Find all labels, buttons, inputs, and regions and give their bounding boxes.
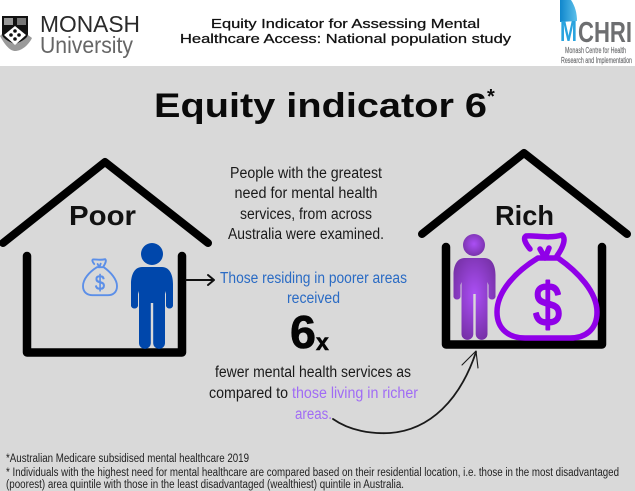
logo: MCHRI: M bbox=[560, 16, 577, 48]
footnotes: (poorest) area quintile with those in the least disadvantaged (wealthiest) quintile in Australia. bbox=[6, 479, 404, 491]
icon: large money bag: $ bbox=[533, 271, 562, 338]
arrow: text to rich house bbox=[333, 351, 478, 433]
logo: MCHRI bbox=[560, 0, 632, 65]
text block: comparison: compared to bbox=[209, 385, 288, 402]
icon: large money bag bbox=[497, 235, 597, 338]
text block: population examined: Australia were examined. bbox=[228, 226, 384, 243]
text block: population examined: People with the greatest bbox=[230, 165, 383, 182]
text block: population examined: services, from across bbox=[240, 206, 372, 223]
icon: small money bag: $ bbox=[95, 272, 105, 295]
logo: Monash University: University bbox=[40, 32, 133, 58]
main title: Equity indicator 6 bbox=[154, 87, 487, 125]
text block: comparison bbox=[209, 364, 418, 423]
label: Rich: Rich bbox=[495, 200, 554, 231]
header title bbox=[180, 17, 512, 46]
big number: 6x bbox=[290, 306, 329, 358]
text block: poorer areas: Those residing in poorer areas bbox=[220, 270, 407, 287]
poor house bbox=[3, 162, 208, 352]
big number: 6x: 6 bbox=[290, 306, 316, 358]
house outline bbox=[422, 153, 627, 344]
label: Poor: Poor bbox=[69, 200, 136, 231]
arrow: poor to text bbox=[186, 275, 214, 285]
text block: poorer areas bbox=[220, 270, 407, 307]
text block: poorer areas: received bbox=[287, 290, 340, 307]
house outline bbox=[3, 162, 208, 352]
footnotes: *Australian Medicare subsidised mental healthcare 2019 bbox=[6, 453, 249, 465]
icon: person purple bbox=[454, 234, 496, 340]
text block: comparison: fewer mental health services as bbox=[215, 364, 411, 381]
text block: population examined bbox=[228, 165, 384, 243]
header band bbox=[0, 0, 635, 66]
rich house bbox=[422, 153, 627, 344]
big number: 6x: x bbox=[316, 329, 329, 355]
text block: population examined: need for mental health bbox=[234, 185, 378, 202]
icon: small money bag bbox=[83, 259, 117, 295]
header title: Equity Indicator for Assessing Mental bbox=[211, 17, 480, 31]
footnotes bbox=[6, 453, 619, 491]
logo: Monash University bbox=[0, 11, 140, 58]
logo: Monash University: MONASH bbox=[40, 11, 140, 37]
icon: person blue bbox=[131, 243, 173, 349]
header title: Healthcare Access: National population study bbox=[180, 32, 512, 46]
text block: comparison: those living in richer bbox=[292, 385, 418, 402]
text block: comparison: areas. bbox=[295, 406, 332, 423]
main title: * bbox=[487, 86, 495, 108]
